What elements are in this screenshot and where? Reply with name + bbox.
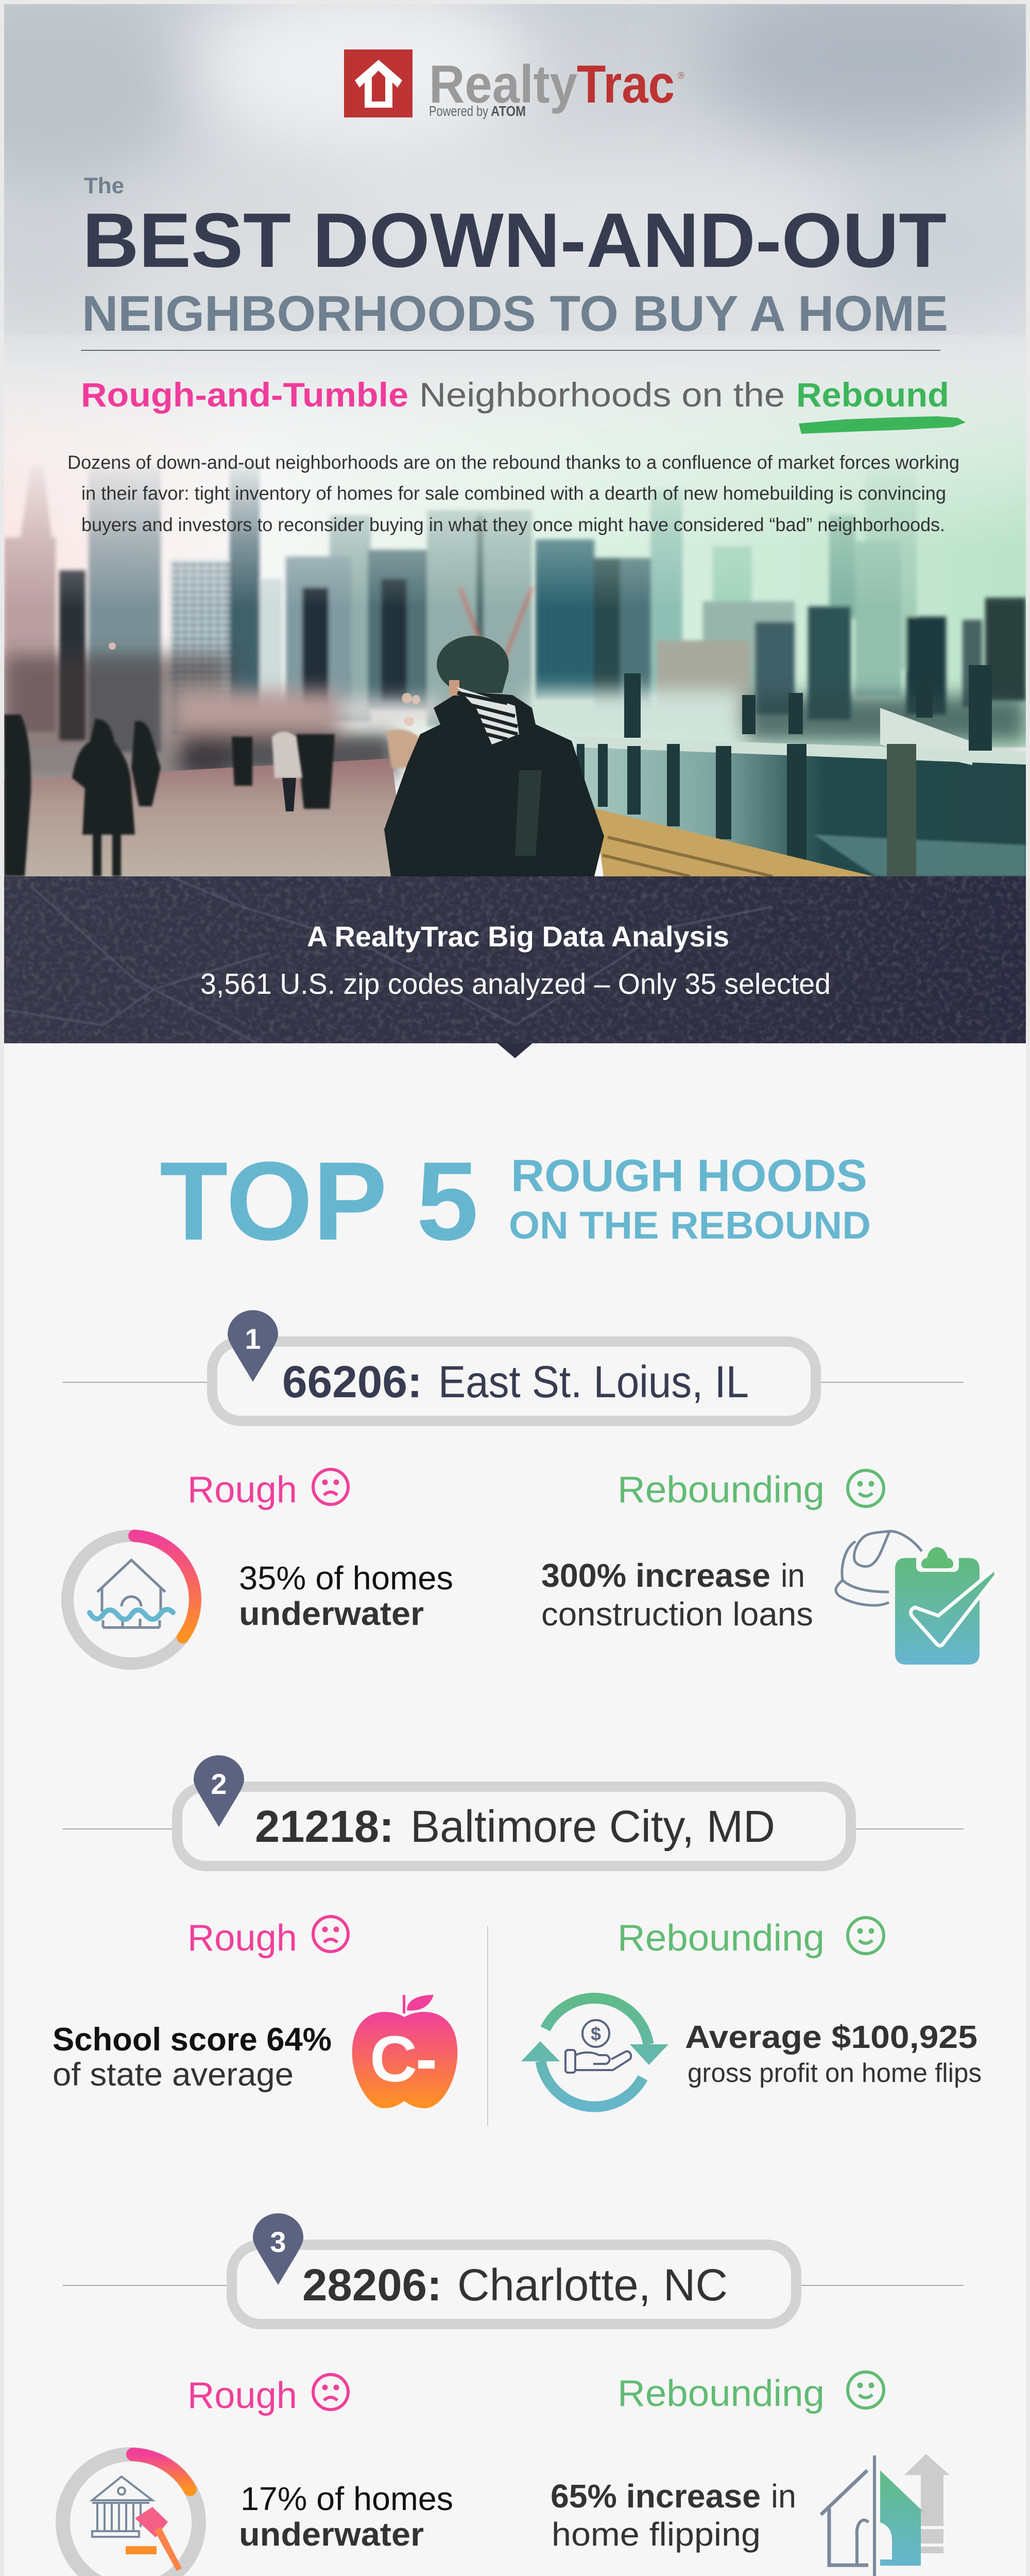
- rough heading: [187, 2375, 348, 2416]
- title: [82, 173, 948, 342]
- icon: flip cycle: $: [591, 2023, 601, 2044]
- stat: home flipping: 65% increase: [551, 2478, 761, 2515]
- intro paragraph: in their favor: tight inventory of homes for sale combined with a dearth of new homebuilding is convincing: [81, 483, 946, 504]
- stat: underwater: [239, 2480, 453, 2553]
- name pill: [232, 2245, 796, 2324]
- name pill: Baltimore City, MD: [410, 1802, 775, 1852]
- name pill: [177, 1787, 851, 1866]
- stat: home flipping: in: [771, 2478, 796, 2515]
- logo wordmark: Powered by: [429, 103, 488, 119]
- number pin: 3: [270, 2226, 286, 2258]
- stat: home flip profit: [685, 2020, 982, 2088]
- stat: home flip profit: Average $100,925: [685, 2020, 977, 2055]
- logo wordmark: [429, 55, 684, 119]
- subtitle: Rough-and-Tumble: [81, 376, 408, 414]
- promenade: [4, 758, 407, 876]
- heading: top 5: ON THE REBOUND: [509, 1204, 871, 1247]
- icon: flip cycle: [521, 1998, 668, 2107]
- icon: flooded house: [90, 1560, 173, 1628]
- icon: helmet and clipboard: [836, 1531, 996, 1665]
- band text: A RealtyTrac Big Data Analysis: [307, 920, 729, 953]
- man in hooded jacket: [384, 636, 604, 876]
- stat: home flipping: home flipping: [552, 2516, 761, 2553]
- panel: neighborhood 2: [53, 1755, 982, 2126]
- panel: neighborhood 3: [63, 2213, 964, 2576]
- pedestrians: [4, 715, 335, 876]
- number pin: [194, 1755, 244, 1827]
- intro paragraph: [67, 452, 959, 535]
- name pill: East St. Loius, IL: [438, 1357, 749, 1407]
- stat: school score: School score 64%: [53, 2022, 332, 2058]
- rough heading: Rough: [187, 1469, 297, 1511]
- stat: underwater: 35% of homes: [239, 1560, 453, 1597]
- number pin: [253, 2213, 303, 2285]
- title: BEST DOWN-AND-OUT: [82, 197, 947, 283]
- logo icon: red square with house arrow: [344, 49, 413, 117]
- icon: apple C-: [352, 1995, 457, 2108]
- stat: school score: [53, 2022, 332, 2093]
- panel: data analysis band: [4, 876, 1026, 1043]
- logo wordmark: Trac: [577, 55, 675, 114]
- stat: construction loans: 300% increase: [541, 1557, 770, 1594]
- stat: underwater: underwater: [239, 1595, 424, 1632]
- icon: split house with arrow: [821, 2454, 950, 2576]
- stat: underwater: 17% of homes: [241, 2480, 453, 2517]
- number pin: 2: [211, 1768, 227, 1800]
- panel: neighborhood 1: [63, 1310, 996, 1665]
- name pill: 28206:: [302, 2260, 442, 2310]
- intro paragraph: buyers and investors to reconsider buying in what they once might have considered “bad” neighborhoods.: [81, 514, 945, 535]
- stat: home flip profit: gross profit on home flips: [688, 2058, 982, 2088]
- band text: [200, 920, 831, 1001]
- logo wordmark: ®: [678, 71, 684, 81]
- rebounding heading: Rebounding: [617, 1918, 825, 1959]
- subtitle: [81, 376, 949, 414]
- bokeh lights: [109, 642, 420, 726]
- rough heading: Rough: [187, 2375, 297, 2416]
- stat: home flipping: [551, 2478, 796, 2553]
- number pin: 1: [245, 1323, 261, 1355]
- title: NEIGHBORHOODS TO BUY A HOME: [82, 285, 948, 342]
- stat: construction loans: in: [781, 1557, 805, 1594]
- water and railing: [575, 665, 1026, 876]
- heading: top 5: [160, 1139, 871, 1263]
- donut: 17% underwater: [63, 2454, 199, 2576]
- band text: 3,561 U.S. zip codes analyzed – Only 35 selected: [200, 968, 831, 1001]
- logo wordmark: ATOM: [491, 103, 526, 119]
- rough heading: [187, 1917, 348, 1959]
- icon: bank and gavel: [92, 2477, 182, 2571]
- name pill: 21218:: [255, 1802, 394, 1852]
- number pin: [228, 1310, 278, 1382]
- name pill: [212, 1342, 816, 1421]
- name pill: Charlotte, NC: [457, 2260, 728, 2310]
- subtitle: Rebound: [796, 376, 949, 414]
- stat: underwater: [239, 1560, 453, 1632]
- band pointer arrow: [497, 1043, 533, 1058]
- stat: construction loans: [541, 1557, 813, 1633]
- logo wordmark: Realty: [429, 55, 577, 114]
- rough heading: Rough: [187, 1918, 297, 1959]
- hero: sky and city photograph: [0, 0, 1030, 876]
- rebounding heading: Rebounding: [617, 1469, 825, 1511]
- name pill: 66206:: [282, 1357, 422, 1407]
- donut: 35% underwater: [67, 1536, 195, 1664]
- rough heading: [187, 1469, 348, 1511]
- heading: top 5: ROUGH HOODS: [511, 1150, 867, 1201]
- stat: construction loans: construction loans: [541, 1596, 813, 1633]
- brush underline: [799, 416, 966, 434]
- icon: apple C-: C: [370, 2023, 417, 2095]
- heading: top 5: TOP 5: [160, 1139, 478, 1263]
- rebounding heading: Rebounding: [617, 2373, 825, 2414]
- logo: RealtyTrac: [344, 49, 684, 119]
- title: The: [84, 173, 124, 198]
- stat: underwater: underwater: [239, 2516, 424, 2553]
- stat: school score: of state average: [53, 2057, 294, 2093]
- subtitle: Neighborhoods on the: [419, 376, 785, 414]
- intro paragraph: Dozens of down-and-out neighborhoods are on the rebound thanks to a confluence of market forces working: [67, 452, 959, 473]
